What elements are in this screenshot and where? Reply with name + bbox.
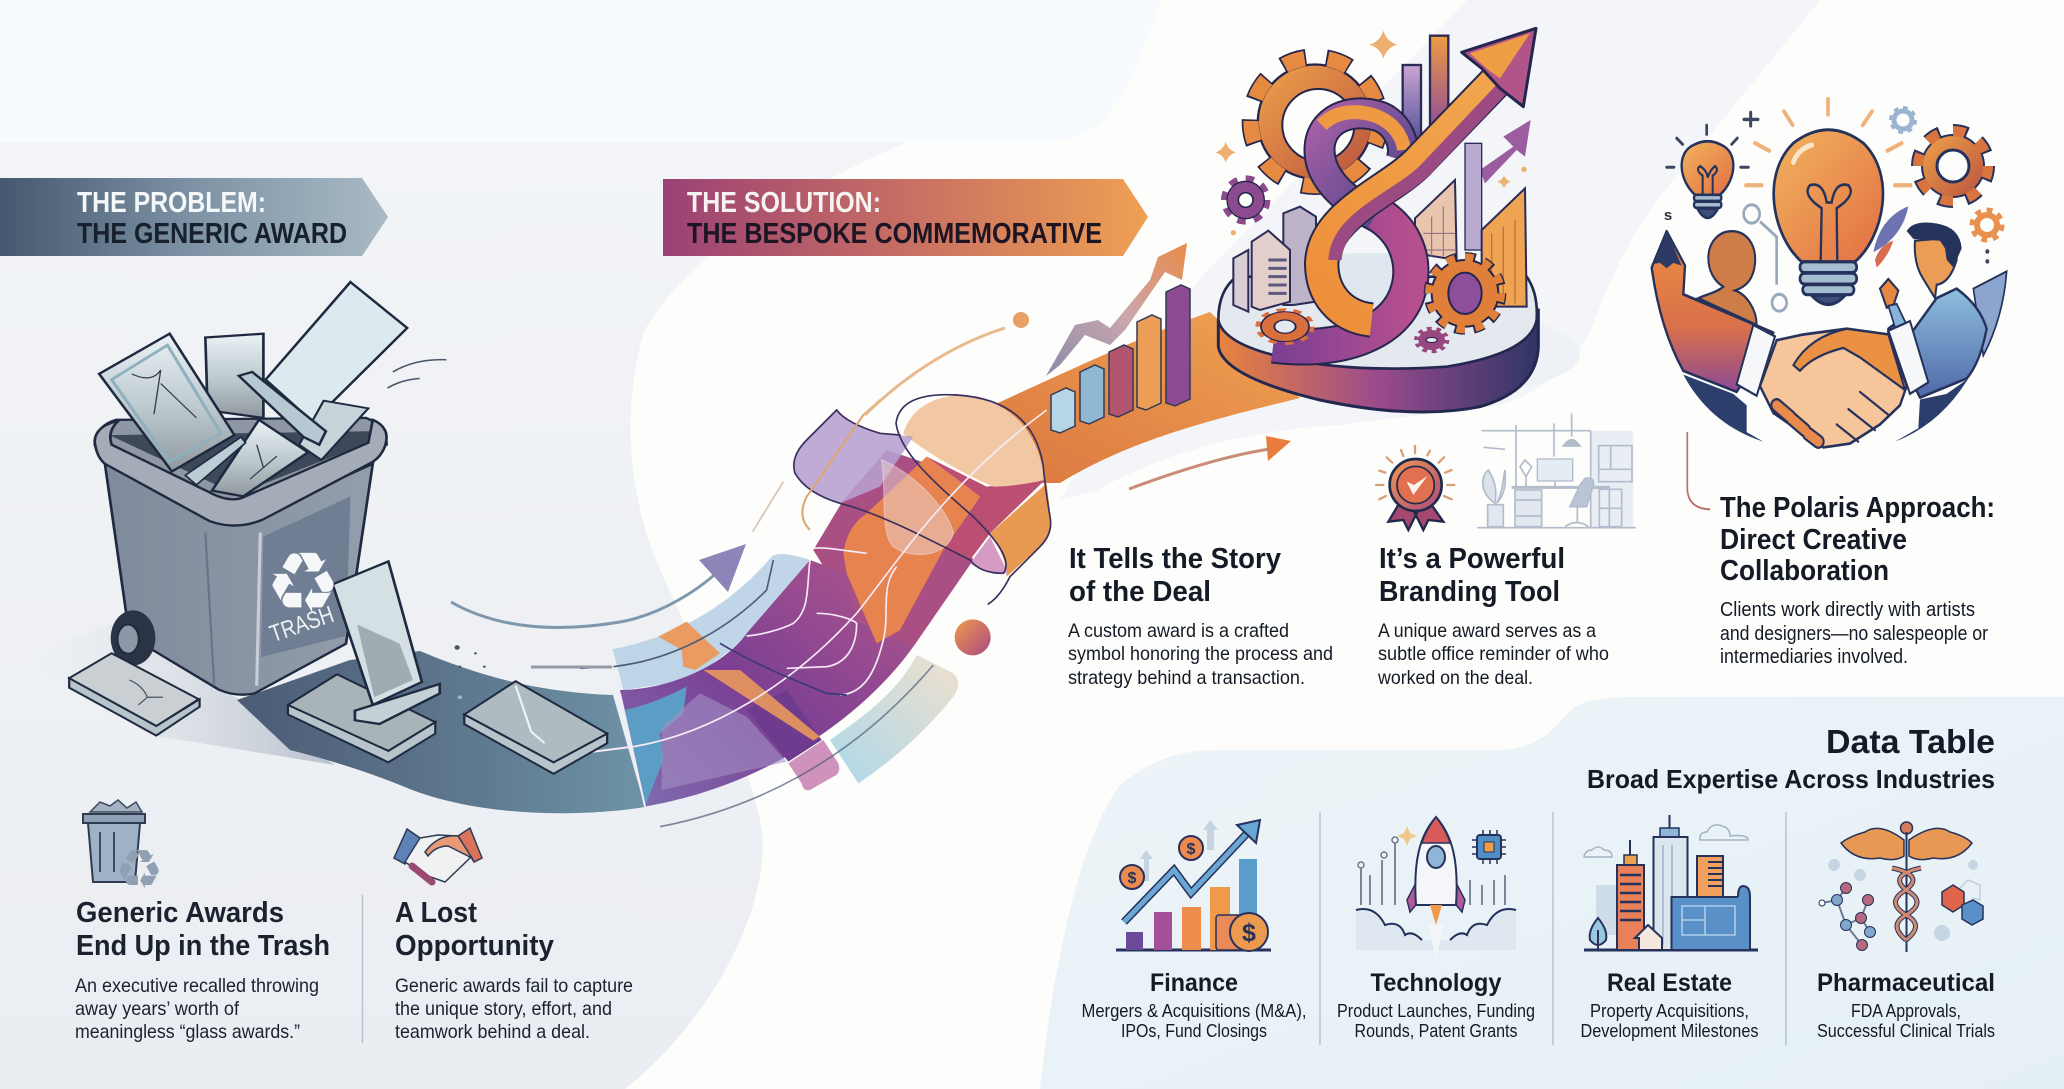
collaboration illustration	[1652, 99, 2007, 509]
ribbon sand tail	[830, 655, 958, 783]
column: pharmaceutical: Pharmaceutical	[1817, 969, 1995, 997]
man head	[1915, 237, 1957, 298]
small bulb	[1682, 141, 1733, 218]
text: a lost opportunity: teamwork behind a deal.	[395, 1021, 590, 1043]
small growth arrow	[1046, 243, 1187, 376]
bin highlights	[205, 533, 214, 686]
text: polaris approach: and designers—no salespeople or	[1720, 623, 1988, 645]
text: polaris approach: The Polaris Approach:	[1720, 492, 1995, 524]
icon: finance: $	[1128, 870, 1137, 887]
icon: finance	[1116, 820, 1271, 951]
large bulb	[1774, 130, 1883, 304]
bin body	[105, 464, 373, 695]
infinity hole	[1337, 253, 1393, 317]
pencil tip	[1654, 231, 1682, 268]
bar 4	[1137, 315, 1161, 410]
ribbon orange centre	[843, 457, 980, 643]
bin bright edge	[257, 533, 260, 686]
man raised forearm	[1888, 304, 1907, 333]
illustration: office	[1477, 413, 1636, 528]
ribbon orange diagonal	[703, 670, 820, 741]
trophy illustration	[1215, 28, 1580, 412]
text: it tells the story: of the Deal	[1069, 576, 1211, 608]
plinth	[1218, 310, 1538, 412]
back wedge	[1973, 271, 2007, 356]
icon label s: s	[1664, 207, 1672, 224]
ribbon dark arcs	[580, 560, 933, 827]
ribbon dark purple patch	[747, 690, 822, 762]
left arm and pencil	[1652, 231, 1773, 392]
column: real estate: Property Acquisitions,	[1590, 1001, 1749, 1021]
column: real estate: Real Estate	[1607, 969, 1732, 997]
orange ribbon to trophy	[960, 312, 1300, 483]
text: it tells the story	[1068, 543, 1333, 689]
man hair	[1907, 223, 1962, 268]
growth accents	[865, 312, 1029, 415]
bar 2	[1080, 365, 1104, 424]
icon: finance: $	[1187, 841, 1196, 858]
column: finance: Finance	[1150, 969, 1238, 997]
fingers	[1777, 392, 1888, 442]
icon: small orange gear	[1973, 211, 2001, 239]
small purple arrow	[1480, 120, 1531, 183]
icon: technology	[1356, 817, 1516, 960]
floor award centre	[288, 674, 435, 762]
ribbon white lines	[580, 410, 1047, 807]
client silhouette	[1698, 231, 1757, 325]
data table heading: Data Table	[1826, 723, 1995, 760]
left navy sleeve	[1683, 375, 1763, 442]
chart shapes	[1415, 143, 1527, 307]
text: generic awards: meaningless “glass awards.”	[75, 1021, 300, 1043]
column: pharmaceutical: Successful Clinical Trials	[1817, 1021, 1995, 1041]
text: polaris approach	[1720, 492, 1995, 668]
arrow head highlight	[1470, 33, 1530, 78]
trophy shadow	[1287, 310, 1580, 397]
column: technology: Technology	[1370, 969, 1502, 997]
column: finance: Mergers & Acquisitions (M&A),	[1082, 1001, 1306, 1021]
back bars	[1403, 36, 1448, 142]
banner: the solution: THE SOLUTION:	[687, 187, 881, 219]
column: finance: IPOs, Fund Closings	[1121, 1021, 1267, 1041]
ribbon pink flap	[970, 537, 1008, 573]
banner: the solution	[663, 179, 1148, 256]
glass award front	[212, 420, 308, 496]
column: technology	[1337, 969, 1535, 1041]
text: a lost opportunity: Opportunity	[395, 930, 554, 962]
connector glyph	[1744, 205, 1787, 311]
dark ground path	[237, 651, 645, 813]
ribbon light blue band	[613, 554, 810, 690]
text: polaris approach: Direct Creative	[1720, 524, 1907, 556]
data table heading: Broad Expertise Across Industries	[1587, 764, 1995, 794]
curved arrow to ribbon	[451, 544, 746, 667]
ribbon blue section	[623, 687, 687, 807]
flat gear	[1260, 311, 1310, 342]
icon: finance: $	[1242, 919, 1256, 947]
medium gear	[1429, 257, 1501, 329]
floor award right	[464, 681, 607, 774]
banner: the solution: THE BESPOKE COMMEMORATIVE	[687, 218, 1102, 250]
left cuff	[1737, 325, 1775, 396]
man raised hand	[1880, 279, 1898, 308]
banner: the problem: THE PROBLEM:	[77, 187, 266, 219]
banner: the problem	[0, 178, 388, 256]
polaris connector line	[1687, 432, 1710, 509]
text: polaris approach: Collaboration	[1720, 555, 1889, 587]
floor award left	[69, 653, 200, 736]
trash bin illustration	[69, 282, 607, 774]
handshake	[1760, 329, 1907, 447]
small purple gear	[1225, 179, 1266, 221]
text: generic awards: away years’ worth of	[75, 998, 240, 1020]
glass award left	[99, 334, 234, 471]
data table heading	[1587, 723, 1995, 794]
small rays	[1667, 113, 1758, 167]
ribbon accent stroke	[753, 482, 783, 532]
column dividers	[1320, 812, 1786, 1045]
bar 5	[1166, 285, 1190, 406]
large gear	[1251, 58, 1379, 186]
ribbon mid red band	[927, 457, 1045, 560]
man navy bottom	[1895, 379, 1968, 442]
column: real estate	[1580, 969, 1758, 1041]
ribbon lavender fold	[794, 410, 913, 503]
bar 1	[1051, 388, 1075, 433]
text: it tells the story: A custom award is a crafted	[1068, 620, 1289, 642]
icon: trash with recycling	[83, 800, 163, 901]
glass award right	[266, 282, 407, 422]
bin recycle symbol: ♻	[265, 534, 341, 632]
plinth top	[1218, 277, 1537, 369]
large bulb highlight	[1793, 145, 1812, 162]
dots	[1985, 249, 1989, 264]
buildings	[1233, 207, 1316, 312]
ribbon outlines	[794, 395, 1051, 604]
ribbon pink tab	[788, 740, 839, 790]
column: pharmaceutical: FDA Approvals,	[1851, 1001, 1961, 1021]
solution arrow ribbon	[580, 395, 1051, 827]
text: it tells the story: It Tells the Story	[1069, 543, 1281, 575]
wheel	[111, 610, 155, 665]
text: generic awards: Generic Awards	[76, 897, 284, 929]
ribbon lens	[882, 460, 953, 554]
text: a lost opportunity	[395, 897, 633, 1043]
banner: the problem: THE GENERIC AWARD	[77, 218, 347, 250]
ribbon lilac patch	[662, 693, 787, 790]
text: it tells the story: symbol honoring the process and	[1068, 643, 1333, 665]
mini bar chart	[1051, 285, 1190, 433]
ribbon magenta lower	[890, 557, 970, 647]
glass award base	[239, 372, 326, 445]
rust arrow	[1129, 436, 1291, 489]
glass award back	[205, 334, 263, 418]
icon: small blue gear	[1892, 109, 1914, 131]
glass shard	[185, 437, 246, 485]
column: real estate: Development Milestones	[1580, 1021, 1758, 1041]
feather	[1873, 206, 1908, 252]
text: generic awards: An executive recalled throwing	[75, 975, 319, 997]
icon: trash with recycling: ♻	[115, 838, 163, 901]
upright glass award	[333, 561, 440, 724]
thumb hand	[1793, 329, 1905, 390]
debris	[454, 645, 486, 699]
text: generic awards	[75, 897, 330, 1043]
infinity ribbon	[1273, 68, 1515, 347]
text: powerful branding tool: A unique award serves as a	[1378, 620, 1596, 642]
light rays	[1746, 99, 1911, 185]
text: a lost opportunity: the unique story, effort, and	[395, 998, 612, 1020]
column: technology: Product Launches, Funding	[1337, 1001, 1535, 1021]
icon: lost handshake	[394, 828, 482, 882]
column: technology: Rounds, Patent Grants	[1354, 1021, 1518, 1041]
ground shadow under bin	[27, 622, 335, 765]
main arrow head	[1462, 28, 1536, 107]
icon: large gear	[1918, 131, 1988, 201]
bin rim	[95, 420, 387, 526]
right cuff	[1888, 321, 1928, 394]
column: pharmaceutical	[1817, 969, 1995, 1041]
text: powerful branding tool: It’s a Powerful	[1379, 543, 1565, 575]
bin trash word: TRASH	[266, 601, 337, 648]
man body	[1888, 289, 1987, 398]
bar 3	[1109, 345, 1133, 417]
dot	[955, 619, 991, 655]
icon: real estate	[1584, 815, 1758, 950]
ribbon accent hook	[802, 400, 880, 530]
text: a lost opportunity: A Lost	[395, 897, 477, 929]
bin dark interior	[109, 431, 370, 494]
ribbon purple body	[620, 560, 913, 807]
text: generic awards: End Up in the Trash	[76, 930, 330, 962]
bin back interior	[95, 418, 387, 517]
ribbon orange patch	[658, 622, 720, 670]
text: powerful branding tool: worked on the deal.	[1377, 667, 1533, 689]
divider	[362, 895, 364, 1043]
text: it tells the story: strategy behind a transaction.	[1068, 667, 1305, 689]
feather tip	[1875, 241, 1893, 268]
text: polaris approach: intermediaries involved.	[1720, 646, 1908, 668]
icon: pharmaceutical	[1819, 822, 1983, 952]
column: finance	[1082, 969, 1306, 1041]
ribbon magenta band	[813, 450, 973, 647]
text: powerful branding tool: subtle office reminder of who	[1378, 643, 1609, 665]
text: polaris approach: Clients work directly with artists	[1720, 599, 1975, 621]
text: powerful branding tool: Branding Tool	[1379, 576, 1560, 608]
ribbon orange flap	[990, 483, 1051, 577]
sparkles	[1215, 31, 1527, 235]
small flat gear	[1417, 329, 1446, 351]
ribbon peach cap	[903, 395, 1045, 487]
text: powerful branding tool	[1377, 543, 1609, 689]
glass award lean	[299, 401, 368, 460]
panel: data table background	[1040, 697, 2064, 1089]
text: a lost opportunity: Generic awards fail to capture	[395, 975, 633, 997]
icon: medal	[1376, 446, 1454, 530]
bin label panel	[261, 496, 350, 657]
motion lines	[388, 360, 446, 388]
